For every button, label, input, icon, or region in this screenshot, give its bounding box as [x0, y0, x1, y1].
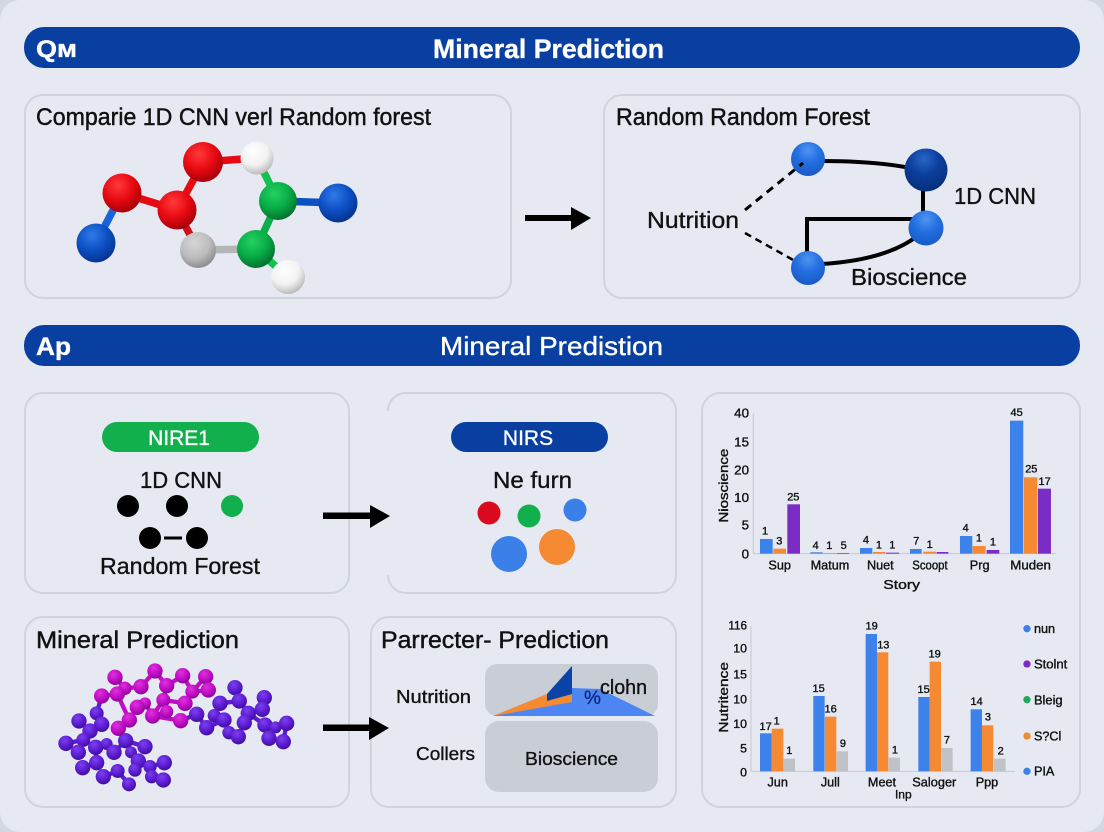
- label: 1D CNN: 1D CNN: [954, 183, 1036, 209]
- y axis ticks: 10: [733, 642, 747, 656]
- legend: Bleig: [1034, 693, 1063, 707]
- panel: parameter prediction: [371, 617, 676, 807]
- label: nutrition: Nutrition: [647, 207, 739, 233]
- y axis ticks: 10: [733, 693, 747, 707]
- y axis title: Nioscience: [717, 449, 731, 523]
- value labels: 4: [963, 523, 969, 535]
- value labels: 17: [1039, 476, 1051, 488]
- molecule: ball and stick: [76, 142, 358, 294]
- banner: top header: Qм: [36, 36, 77, 63]
- label: collers: Collers: [416, 744, 475, 764]
- value labels: 1: [927, 539, 933, 551]
- value labels: 3: [776, 535, 782, 547]
- pill: NIRE1: NIRE1: [148, 427, 210, 450]
- pill: NIRE1: [102, 422, 259, 452]
- mini area chart: %: [584, 688, 601, 709]
- box: bioscience: Bioscience: [525, 749, 618, 769]
- legend: S?Cl: [1034, 729, 1061, 743]
- value labels: 13: [877, 639, 889, 651]
- panel: compare 1D CNN molecule: [25, 95, 511, 298]
- bars: blue: [760, 421, 1023, 554]
- panel: random forest network: [604, 95, 1080, 298]
- value labels: [760, 620, 1004, 758]
- y axis ticks: [728, 619, 747, 780]
- y axis ticks: 116: [728, 619, 747, 633]
- value labels: 4: [863, 534, 869, 546]
- panel: NIRE1: [25, 393, 349, 593]
- panel: charts: [702, 393, 1080, 807]
- y axis ticks: [734, 405, 749, 562]
- label: nutrition: Nutrition: [396, 687, 471, 707]
- y axis ticks: 5: [742, 518, 749, 533]
- y axis ticks: 0: [742, 547, 749, 562]
- heading: random forest: Random Random Forest: [616, 104, 870, 131]
- value labels: 2: [998, 746, 1004, 758]
- label: 1D CNN: 1D CNN: [140, 467, 222, 493]
- polymer molecule: [58, 663, 294, 791]
- label: random forest: Random Forest: [100, 553, 261, 579]
- category labels: Sup: [768, 559, 791, 573]
- bars: grey: [783, 748, 1006, 771]
- y axis ticks: 10: [734, 490, 749, 505]
- value labels: 45: [1011, 407, 1023, 419]
- value labels: 1: [826, 540, 832, 552]
- mini area chart: clohn: [600, 677, 647, 699]
- value labels: 5: [841, 540, 847, 552]
- y axis ticks: 5: [740, 742, 747, 756]
- category labels: Jull: [821, 776, 840, 790]
- value labels: 1: [762, 525, 768, 537]
- heading: mineral prediction: Mineral Prediction: [36, 627, 239, 654]
- arrow: NIRE1 to NIRS: [323, 505, 390, 528]
- value labels: 1: [892, 745, 898, 757]
- heading: parameter prediction: Parrecter- Prediction: [381, 627, 609, 654]
- bars: blue: [760, 634, 982, 771]
- category labels: Matum: [811, 559, 849, 573]
- value labels: 15: [918, 684, 930, 696]
- label: bioscience: Bioscience: [851, 264, 967, 290]
- y axis ticks: 0: [740, 766, 747, 780]
- legend: nun: [1034, 622, 1055, 636]
- value labels: 16: [825, 703, 837, 715]
- value labels: 1: [889, 540, 895, 552]
- coloured dots: [478, 498, 586, 572]
- x axis title: Story: [883, 578, 921, 592]
- pill: NIRS: [451, 422, 608, 452]
- pill: NIRS: NIRS: [503, 427, 553, 450]
- value labels: 25: [787, 491, 799, 503]
- value labels: 15: [813, 683, 825, 695]
- y axis title: Nutritence: [717, 662, 731, 733]
- category labels: Ppp: [976, 776, 998, 790]
- value labels: 9: [840, 738, 846, 750]
- value labels: 4: [813, 540, 819, 552]
- value labels: 7: [944, 735, 950, 747]
- bar chart: story: [717, 405, 1056, 592]
- category labels: Jun: [767, 776, 788, 790]
- value labels: 1: [990, 536, 996, 548]
- bar chart: nutrition: [717, 619, 1068, 801]
- value labels: 19: [866, 620, 878, 632]
- y axis ticks: 15: [733, 668, 747, 682]
- value labels: 17: [760, 721, 772, 733]
- network diagram: [647, 142, 1036, 290]
- category labels: Scoopt: [912, 559, 948, 573]
- panel: NIRS: [388, 393, 676, 593]
- value labels: [762, 407, 1051, 552]
- arrow: polymer to parameter prediction: [323, 717, 389, 740]
- heading: compare: Comparie 1D CNN verl Random forest: [36, 104, 431, 131]
- value labels: 3: [985, 712, 991, 724]
- mini area chart: [485, 664, 658, 716]
- category labels: Nuet: [867, 559, 894, 573]
- legend: [1023, 622, 1068, 779]
- banner: top header: Mineral Prediction: [433, 34, 664, 64]
- banner: top header: [24, 27, 1080, 68]
- value labels: 14: [971, 696, 983, 708]
- box: bioscience: [485, 721, 658, 792]
- value labels: 1: [786, 745, 792, 757]
- category labels: Muden: [1010, 559, 1051, 573]
- category labels: Meet: [868, 776, 897, 790]
- category labels: [768, 559, 1051, 573]
- bars: orange: [773, 477, 1037, 554]
- y axis ticks: 40: [734, 405, 749, 420]
- value labels: 19: [929, 649, 941, 661]
- x axis title: Inp: [895, 787, 912, 801]
- bars: purple: [787, 489, 1051, 554]
- value labels: 25: [1025, 464, 1037, 476]
- bars: orange: [772, 652, 993, 771]
- arrow: molecule to network: [525, 207, 591, 230]
- category labels: Saloger: [912, 776, 956, 790]
- legend: PIA: [1034, 765, 1055, 779]
- value labels: 1: [976, 532, 982, 544]
- y axis ticks: 10: [733, 717, 747, 731]
- banner: second header: Mineral Predistion: [440, 331, 663, 361]
- category labels: Prg: [970, 559, 989, 573]
- panel: mineral prediction polymer: [25, 617, 349, 807]
- value labels: 1: [774, 716, 780, 728]
- y axis ticks: 15: [734, 434, 749, 449]
- dots diagram: [117, 495, 243, 549]
- category labels: [767, 776, 998, 790]
- banner: second header: Ap: [36, 333, 71, 361]
- y axis ticks: 20: [734, 463, 749, 478]
- banner: second header: [24, 325, 1080, 366]
- value labels: 1: [876, 540, 882, 552]
- legend: Stolnt: [1034, 657, 1068, 671]
- label: ne furn: Ne furn: [493, 467, 572, 493]
- value labels: 7: [913, 535, 919, 547]
